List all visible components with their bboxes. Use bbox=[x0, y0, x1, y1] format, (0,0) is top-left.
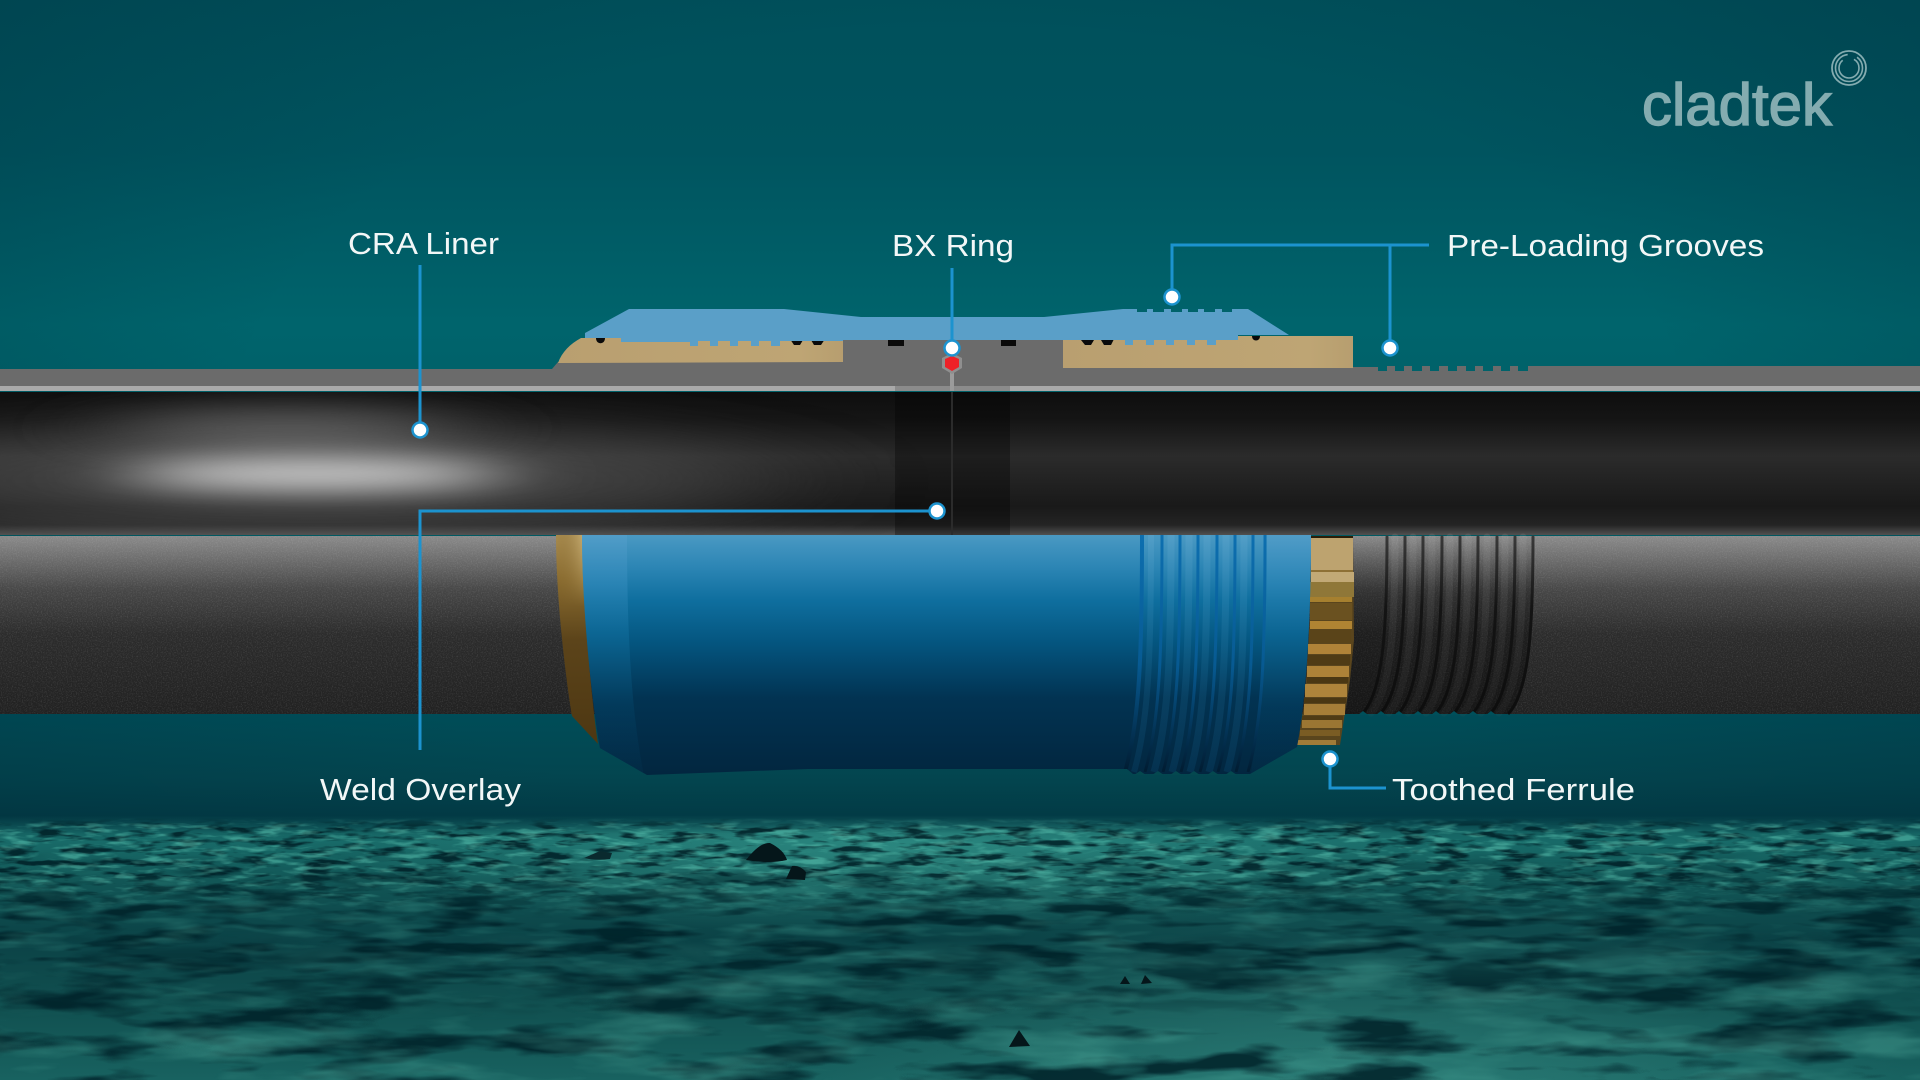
logo ring icon bbox=[1832, 51, 1866, 85]
bore highlights bbox=[0, 410, 770, 535]
label: Pre-Loading Grooves: Pre-Loading Grooves bbox=[1447, 228, 1764, 263]
leader: Weld Overlay bbox=[420, 504, 944, 750]
logo: cladtek: cladtek bbox=[1642, 72, 1832, 138]
leader: BX Ring bbox=[944, 268, 960, 356]
inner pipe bore bbox=[0, 392, 1920, 535]
label: CRA Liner: CRA Liner bbox=[348, 226, 499, 261]
leader: Pre-Loading Grooves bbox=[1164, 245, 1429, 356]
seabed texture bbox=[0, 815, 1920, 1080]
left gold ferrule edge bbox=[556, 535, 598, 744]
cross-section: tan liner right bbox=[1063, 336, 1353, 368]
label: BX Ring: BX Ring bbox=[892, 228, 1014, 263]
outer pipe bbox=[0, 536, 1920, 714]
leader: CRA Liner bbox=[412, 265, 428, 438]
threaded grey pre-loading grooves bbox=[1345, 537, 1533, 715]
toothed ferrule bbox=[1297, 536, 1354, 745]
cross-section: BX ring bbox=[942, 353, 962, 374]
body end facets bbox=[582, 540, 636, 732]
cross-section: blue coupling bbox=[585, 309, 1289, 346]
cross-section: tan liner left bbox=[558, 338, 843, 363]
label: Weld Overlay: Weld Overlay bbox=[320, 772, 522, 807]
blue coupling body bbox=[582, 535, 1311, 780]
cross-section: seals bbox=[596, 336, 1260, 346]
leader: Toothed Ferrule bbox=[1322, 752, 1386, 788]
cross-section: steel wall bbox=[0, 340, 1920, 391]
label: Toothed Ferrule: Toothed Ferrule bbox=[1392, 772, 1635, 807]
body threads bbox=[1125, 535, 1265, 772]
seabed rocks bbox=[584, 843, 1152, 1047]
logo: cladtek bbox=[1642, 51, 1866, 138]
weld band bbox=[895, 392, 1010, 535]
